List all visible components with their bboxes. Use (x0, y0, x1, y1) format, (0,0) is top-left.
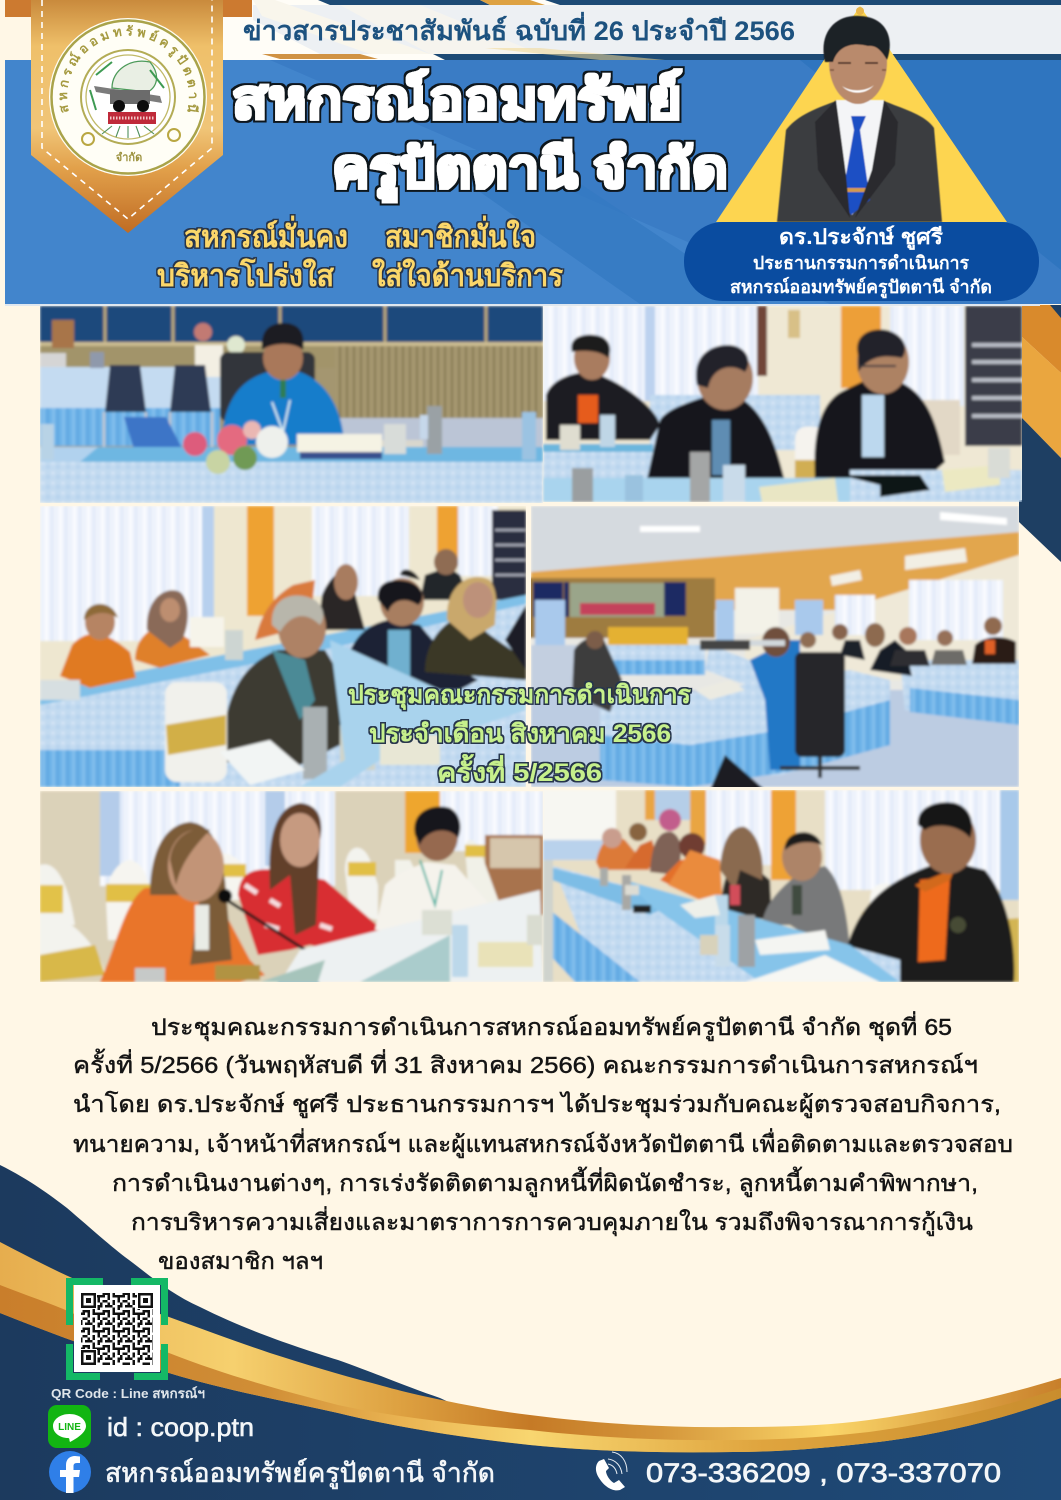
name plate (684, 222, 1039, 301)
right side decorative stripes (1019, 305, 1061, 562)
photo 1: chairman at head table (40, 306, 543, 503)
logo seal (49, 18, 207, 176)
photo caption overlay: ครั้งที่ 5/2566 (437, 753, 602, 787)
ribbon badge with logo (5, 0, 252, 233)
chairman portrait (716, 6, 1007, 222)
LINE id: id : coop.ptn (107, 1412, 254, 1442)
icon: LINE (48, 1405, 91, 1448)
icon: phone (596, 1452, 627, 1490)
body text paragraph: ของสมาชิก ฯลฯ (158, 1248, 323, 1274)
QR caption: QR Code : Line สหกรณ์ฯ (51, 1386, 205, 1401)
photo caption overlay: ประจำเดือน สิงหาคม 2566 (369, 720, 671, 748)
header blue panel (5, 60, 1061, 306)
slogan: สมาชิกมั่นใจ (385, 215, 536, 254)
logo seal: จำกัด (116, 151, 142, 164)
top strip (220, 0, 1061, 60)
title: cooperative name: ครูปัตตานี จำกัด (332, 139, 728, 202)
footer curved bands (0, 1165, 1061, 1500)
photo 4: wide view of meeting room (525, 506, 1019, 790)
slogan: ใส่ใจด้านบริการ (372, 258, 563, 293)
heading: newsletter issue: ข่าวสารประชาสัมพันธ์ ฉบับที่ 26 ประจำปี 2566 (243, 11, 795, 46)
title: cooperative name (232, 69, 728, 202)
photo 2: committee members seated (543, 306, 1022, 502)
body text paragraph: นำโดย ดร.ประจักษ์ ชูศรี ประธานกรรมการฯ ได้ประชุมร่วมกับคณะผู้ตรวจสอบกิจการ, (73, 1091, 1001, 1118)
photo caption overlay (348, 681, 692, 787)
photo 5: women speaking (40, 791, 543, 985)
Facebook page name: สหกรณ์ออมทรัพย์ครูปัตตานี จำกัด (105, 1457, 495, 1489)
slogan (157, 215, 563, 293)
title: cooperative name: สหกรณ์ออมทรัพย์ (232, 69, 682, 130)
icon: Facebook (49, 1451, 91, 1493)
photo caption overlay: ประชุมคณะกรรมการดำเนินการ (348, 681, 692, 711)
body text paragraph: ทนายความ, เจ้าหน้าที่สหกรณ์ฯ และผู้แทนสหกรณ์จังหวัดปัตตานี เพื่อติดตามและตรวจสอบ (73, 1128, 1013, 1158)
body text paragraph: ประชุมคณะกรรมการดำเนินการสหกรณ์ออมทรัพย์ครูปัตตานี จำกัด ชุดที่ 65 (151, 1011, 952, 1041)
photo 6: members along the table (543, 790, 1019, 982)
body text paragraph: การบริหารความเสี่ยงและมาตราการการควบคุมภายใน รวมถึงพิจารณาการกู้เงิน (131, 1206, 973, 1236)
slogan: สหกรณ์มั่นคง (184, 215, 348, 254)
slogan: บริหารโปร่งใส (157, 257, 335, 293)
name plate: ประธานกรรมการดำเนินการ (753, 253, 969, 273)
body text paragraph: การดำเนินงานต่างๆ, การเร่งรัดติดตามลูกหนี้ที่ผิดนัดชำระ, ลูกหนี้ตามคำพิพากษา, (112, 1167, 978, 1197)
photo 3: members taking notes (40, 506, 526, 787)
name plate: ดร.ประจักษ์ ชูศรี (779, 225, 944, 251)
phone numbers: 073-336209 , 073-337070 (646, 1458, 1001, 1488)
logo seal: สหกรณ์ออมทรัพย์ครูปัตตานี (59, 24, 199, 113)
name plate: สหกรณ์ออมทรัพย์ครูปัตตานี จำกัด (730, 276, 992, 299)
body text paragraph: ครั้งที่ 5/2566 (วันพฤหัสบดี ที่ 31 สิงหาคม 2566) คณะกรรมการดำเนินการสหกรณ์ฯ (73, 1049, 978, 1078)
body text paragraph (73, 1011, 1013, 1274)
icon: LINE: LINE (58, 1422, 81, 1433)
QR code block (70, 1282, 164, 1376)
